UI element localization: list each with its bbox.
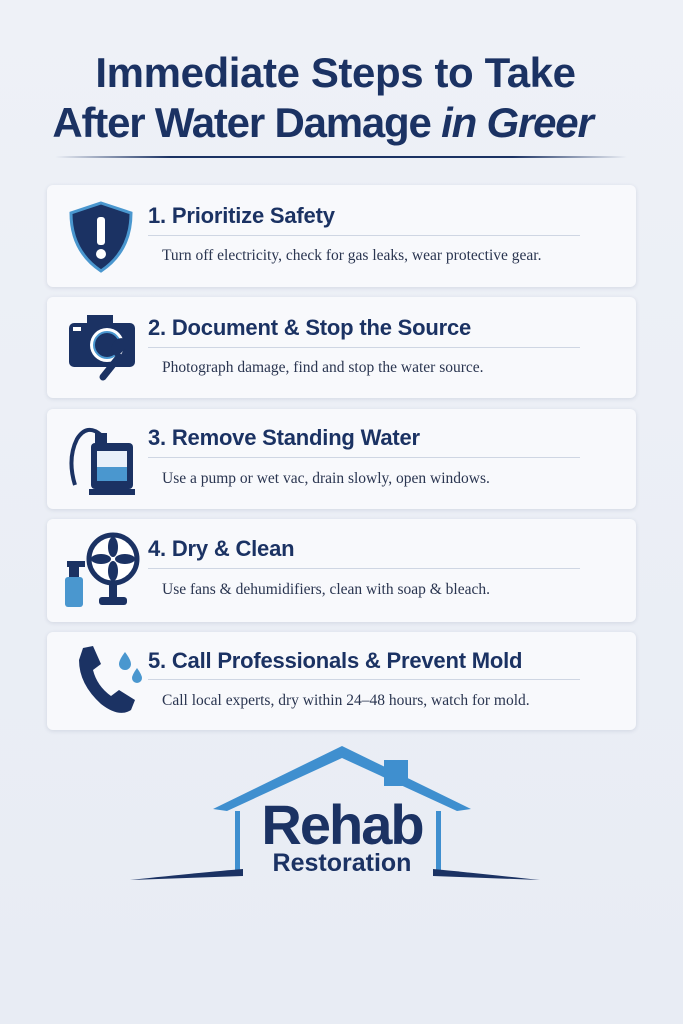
panel: step 2: Photograph damage, find and stop the water source. xyxy=(162,359,484,376)
panel: step 5: Call local experts, dry within 24–48 hours, watch for mold. xyxy=(162,692,530,709)
panel: step 3 xyxy=(47,409,636,509)
panel: step 2: 2. Document & Stop the Source xyxy=(148,315,471,340)
icon: phone and drops xyxy=(79,646,142,713)
icon: camera and wrench xyxy=(69,315,135,380)
title: After Water Damage in Greer xyxy=(52,99,593,146)
title: Immediate Steps to Take xyxy=(95,49,576,96)
icon: fan and spray xyxy=(65,532,140,607)
panel: step 4: Use fans & dehumidifiers, clean with soap & bleach. xyxy=(162,581,490,598)
panel: step 3: Use a pump or wet vac, drain slowly, open windows. xyxy=(162,470,490,487)
panel: step 4 xyxy=(47,519,636,622)
icon: pump xyxy=(69,428,135,495)
panel: step 2 xyxy=(47,297,636,398)
logo: Restoration xyxy=(273,849,411,877)
panel: step 3: 3. Remove Standing Water xyxy=(148,425,420,450)
panel: step 4: 4. Dry & Clean xyxy=(148,536,294,561)
logo: Rehab xyxy=(261,793,423,856)
panel: step 1: 1. Prioritize Safety xyxy=(148,203,335,228)
title xyxy=(52,49,596,146)
panel: step 1 xyxy=(47,185,636,287)
panel: step 5 xyxy=(47,632,636,730)
panel: step 1: Turn off electricity, check for gas leaks, wear protective gear. xyxy=(162,247,541,264)
panel: step 5: 5. Call Professionals & Prevent Mold xyxy=(148,648,522,673)
logo xyxy=(130,746,540,880)
icon: shield xyxy=(70,201,132,273)
